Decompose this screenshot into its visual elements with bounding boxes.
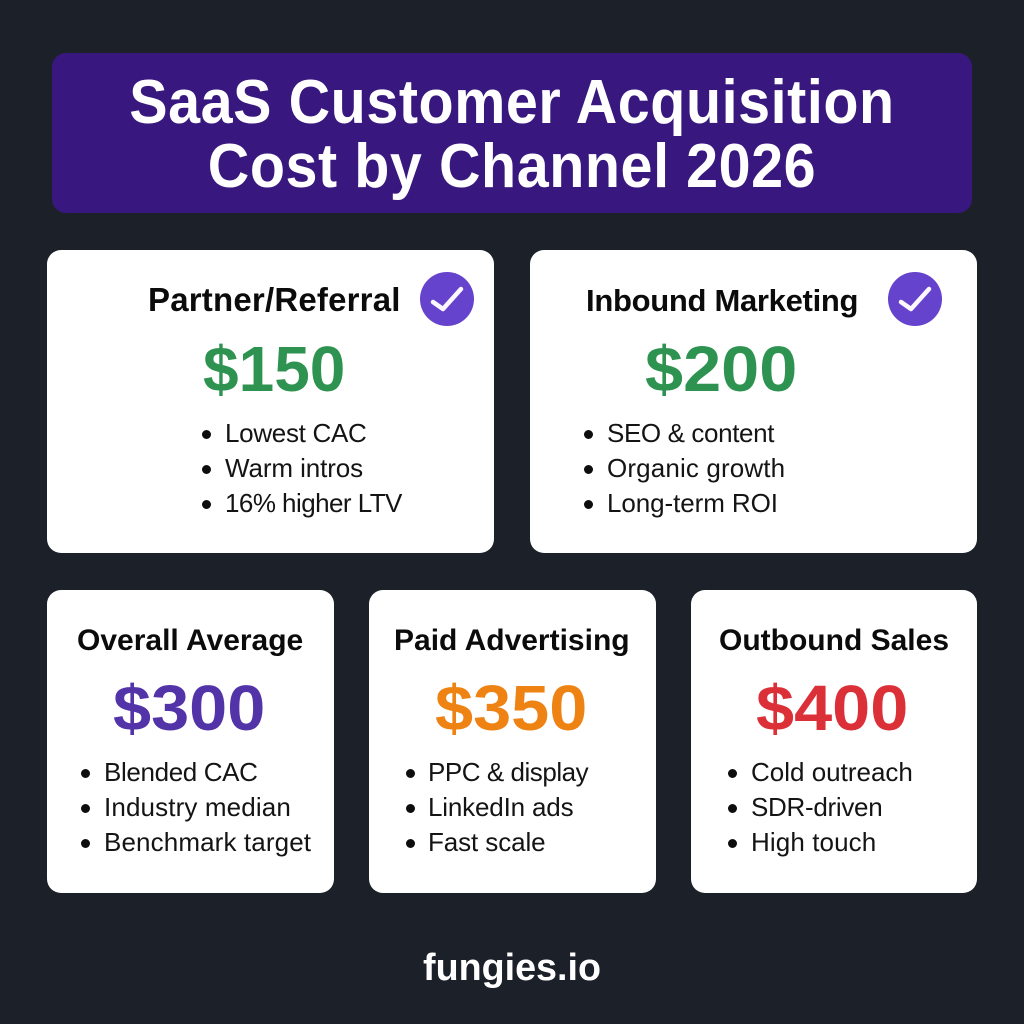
price: $400 [756, 672, 908, 744]
heading: Overall Average [77, 624, 303, 657]
bullet list [81, 757, 311, 857]
bullet list: Organic growth [607, 453, 785, 483]
bullet list: High touch [751, 827, 876, 857]
panel: Inbound Marketing [530, 250, 977, 553]
title [129, 68, 895, 201]
icon: check badge [420, 272, 474, 326]
panel: Overall Average [47, 590, 334, 893]
title: SaaS Customer Acquisition [129, 68, 895, 137]
panel: Outbound Sales [691, 590, 977, 893]
price: $350 [435, 672, 587, 744]
bullet list: Warm intros [225, 453, 363, 483]
icon: check badge [888, 272, 942, 326]
price: $300 [113, 672, 265, 744]
bullet list: Long-term ROI [607, 488, 778, 518]
heading: Paid Advertising [394, 624, 630, 657]
bullet list [728, 757, 913, 857]
bullet list: Blended CAC [104, 757, 258, 787]
price: $150 [203, 333, 345, 405]
bullet list: SDR-driven [751, 792, 882, 822]
bullet list: Lowest CAC [225, 418, 366, 448]
panel: Partner/Referral [47, 250, 494, 553]
bullet list: Cold outreach [751, 757, 913, 787]
heading: Partner/Referral [148, 281, 401, 318]
heading: Outbound Sales [719, 624, 949, 657]
bullet list: PPC & display [428, 757, 588, 787]
heading: Inbound Marketing [586, 283, 858, 318]
bullet list [202, 418, 402, 518]
panel: Paid Advertising [369, 590, 656, 893]
bullet list [584, 418, 785, 518]
bullet list: Fast scale [428, 827, 546, 857]
footer brand: fungies.io [423, 946, 601, 988]
bullet list: Industry median [104, 792, 291, 822]
price: $200 [645, 333, 797, 405]
bullet list [406, 757, 588, 857]
title banner [52, 53, 972, 213]
bullet list: 16% higher LTV [225, 488, 402, 518]
bullet list: LinkedIn ads [428, 792, 573, 822]
bullet list: Benchmark target [104, 827, 311, 857]
bullet list: SEO & content [607, 418, 774, 448]
title: Cost by Channel 2026 [208, 132, 816, 201]
